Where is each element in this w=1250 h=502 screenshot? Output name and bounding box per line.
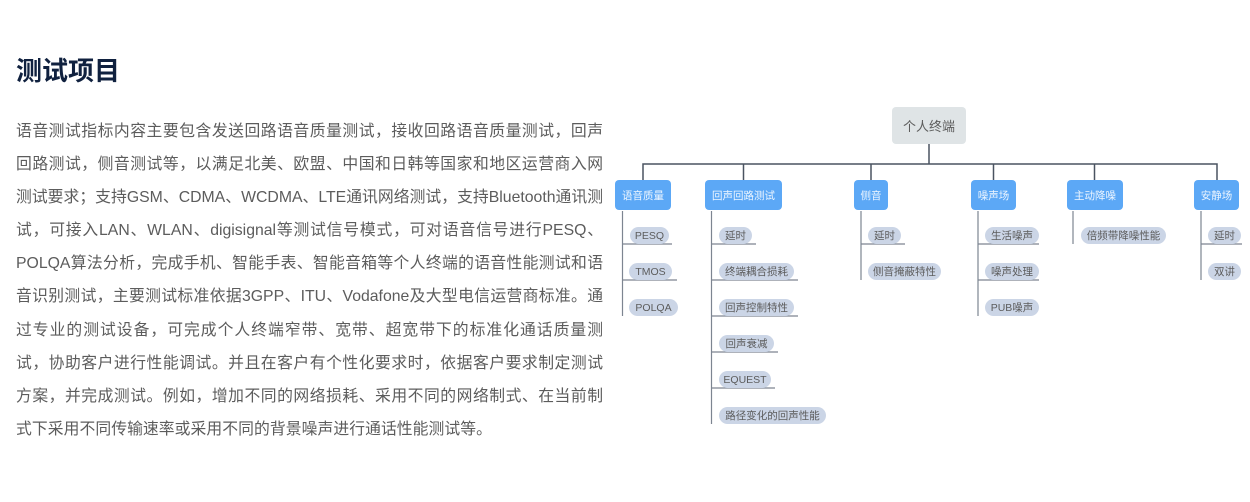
text block: test item description: 式下采用不同传输速率或采用不同的背景噪声进行通话性能测试等。 <box>16 421 492 438</box>
text block: test item description: POLQA算法分析，完成手机、智能手表、智能音箱等个人终端的语音性能测试和语 <box>16 255 603 272</box>
item: 延时: 延时 <box>725 230 746 242</box>
item: 终端耦合损耗 <box>719 263 794 280</box>
node: 回声回路测试 <box>705 180 782 210</box>
item: 噪声处理: 噪声处理 <box>991 266 1033 278</box>
text block: test item description: 音识别测试，主要测试标准依据3GPP、ITU、Vodafone及大型电信运营商标准。通 <box>16 288 603 305</box>
item: 回声控制特性 <box>719 299 794 316</box>
item: PESQ: PESQ <box>635 230 664 242</box>
node: 语音质量 <box>615 180 671 210</box>
node: 回声回路测试: 回声回路测试 <box>712 190 775 202</box>
text block: test item description: 过专业的测试设备，可完成个人终端窄带、宽带、超宽带下的标准化通话质量测 <box>16 322 603 339</box>
item: 回声控制特性: 回声控制特性 <box>725 302 788 314</box>
item: 侧音掩蔽特性: 侧音掩蔽特性 <box>873 266 936 278</box>
item: TMOS <box>629 263 672 280</box>
node: 主动降噪 <box>1067 180 1123 210</box>
text block: test item description: 试，协助客户进行性能调试。并且在客户有个性化要求时，依据客户要求制定测试 <box>16 355 603 372</box>
item: TMOS: TMOS <box>635 266 666 278</box>
item: 生活噪声: 生活噪声 <box>991 230 1033 242</box>
text block: test item description <box>16 122 603 438</box>
item: PESQ <box>630 227 669 244</box>
title: 测试项目 <box>16 56 120 86</box>
item: 回声衰减 <box>719 335 774 352</box>
text block: test item description: 试，可接入LAN、WLAN、digisignal等测试信号模式，可对语音信号进行PESQ、 <box>16 222 603 239</box>
item: 侧音延时 <box>868 227 901 244</box>
node: 侧音: 侧音 <box>860 190 882 202</box>
item: EQUEST: EQUEST <box>723 374 767 386</box>
item: 回声衰减: 回声衰减 <box>726 338 768 350</box>
node: 语音质量: 语音质量 <box>622 190 664 202</box>
item: 路径变化的回声性能: 路径变化的回声性能 <box>725 410 820 422</box>
item: 安静场延时 <box>1208 227 1241 244</box>
item: 侧音延时: 延时 <box>874 230 895 242</box>
item: 双讲 <box>1208 263 1241 280</box>
item: 终端耦合损耗: 终端耦合损耗 <box>725 266 788 278</box>
item: PUB噪声: PUB噪声 <box>991 302 1033 314</box>
text block: test item description: 语音测试指标内容主要包含发送回路语音质量测试，接收回路语音质量测试，回声 <box>16 123 603 140</box>
item: PUB噪声 <box>985 299 1039 316</box>
item: 倍频带降噪性能: 倍频带降噪性能 <box>1087 230 1160 242</box>
item: 路径变化的回声性能 <box>719 407 826 424</box>
node: 主动降噪: 主动降噪 <box>1074 190 1116 202</box>
node: 安静场: 安静场 <box>1201 190 1232 202</box>
item: 倍频带降噪性能 <box>1081 227 1166 244</box>
node: 安静场 <box>1194 180 1239 210</box>
item: POLQA <box>629 299 678 316</box>
item: EQUEST <box>719 371 771 388</box>
item: 双讲: 双讲 <box>1214 266 1235 278</box>
item: POLQA: POLQA <box>635 302 672 314</box>
node: 噪声场 <box>971 180 1016 210</box>
item: 安静场延时: 延时 <box>1214 230 1235 242</box>
text block: test item description: 测试要求；支持GSM、CDMA、WCDMA、LTE通讯网络测试，支持Bluetooth通讯测 <box>16 189 603 206</box>
item: 延时 <box>719 227 752 244</box>
root node: 个人终端 <box>903 119 955 134</box>
node: 侧音 <box>854 180 888 210</box>
item: 生活噪声 <box>985 227 1039 244</box>
text block: test item description: 回路测试，侧音测试等，以满足北美、欧盟、中国和日韩等国家和地区运营商入网 <box>16 156 603 173</box>
item: 噪声处理 <box>985 263 1039 280</box>
text block: test item description: 方案，并完成测试。例如，增加不同的网络损耗、采用不同的网络制式、在当前制 <box>16 388 603 405</box>
node: 噪声场: 噪声场 <box>978 190 1009 202</box>
root node <box>892 107 966 144</box>
item: 侧音掩蔽特性 <box>868 263 941 280</box>
